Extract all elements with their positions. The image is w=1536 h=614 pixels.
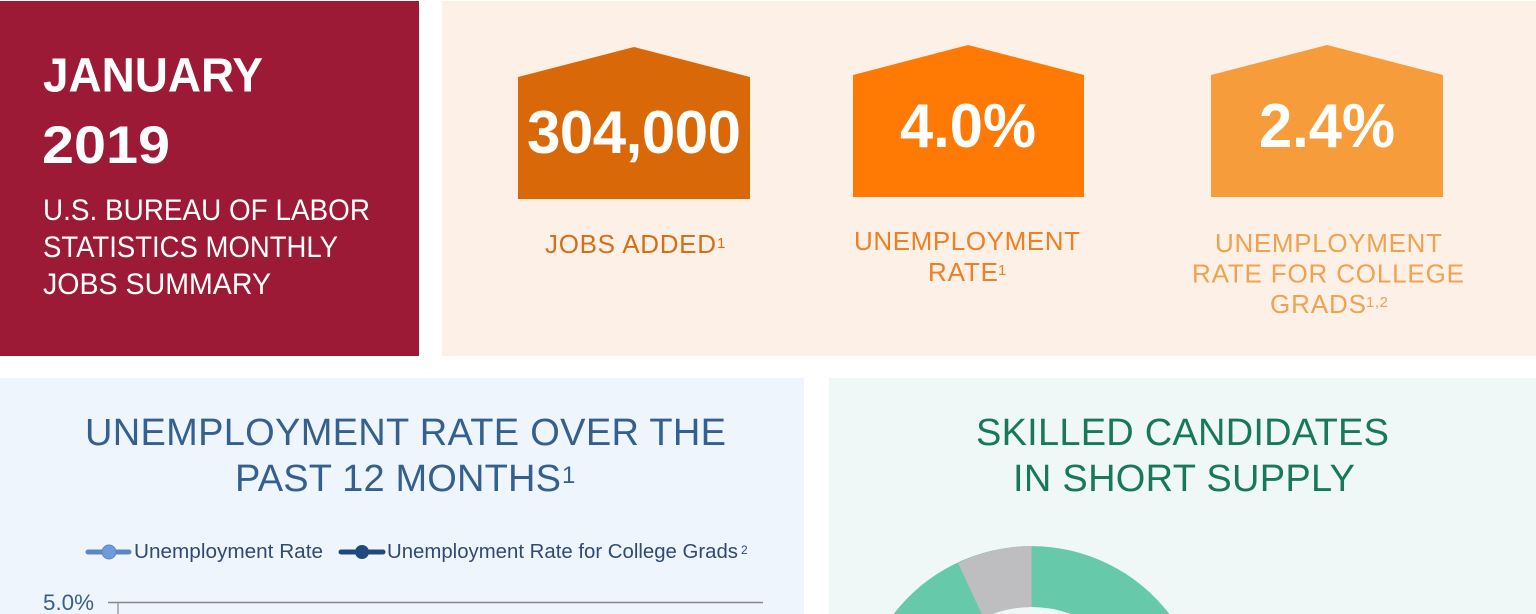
donut segment: gray — [958, 546, 1032, 614]
heading: January 2019 — [42, 50, 263, 175]
heading: unemployment rate over the past 12 months — [85, 412, 726, 500]
panel: skilled candidates donut — [829, 378, 1536, 614]
heading: January 2019: JANUARY — [43, 50, 263, 102]
panel: date and source — [0, 1, 419, 356]
legend: college grads: 2 — [741, 543, 748, 557]
text: report source: JOBS SUMMARY — [43, 268, 271, 301]
stat: unemployment rate: 4.0% — [900, 92, 1036, 161]
stat: jobs added: 1 — [717, 235, 725, 252]
stat: unemployment rate: RATE — [928, 257, 998, 287]
stat: jobs added: JOBS ADDED — [545, 229, 716, 259]
stat: unemployment rate for college grads — [1192, 45, 1464, 319]
panel: unemployment line chart — [0, 378, 804, 614]
heading: unemployment rate over the past 12 months: UNEMPLOYMENT RATE OVER THE — [85, 412, 726, 454]
heading: unemployment rate over the past 12 months: PAST 12 MONTHS — [235, 458, 561, 500]
stat: unemployment rate for college grads: 2.4% — [1259, 92, 1395, 161]
text: report source: U.S. BUREAU OF LABOR — [43, 194, 370, 227]
stat: unemployment rate for college grads: UNEMPLOYMENT — [1215, 228, 1442, 258]
heading: January 2019: 2019 — [42, 116, 170, 175]
stat: unemployment rate: 1 — [998, 262, 1006, 279]
stat: unemployment rate: UNEMPLOYMENT — [854, 226, 1080, 256]
heading: skilled candidates in short supply — [976, 412, 1389, 500]
stat: unemployment rate for college grads: 1,2 — [1366, 294, 1388, 311]
chart legend — [88, 541, 748, 563]
stat: jobs added — [518, 47, 750, 259]
heading: unemployment rate over the past 12 months: 1 — [562, 462, 575, 489]
legend: college grads: Unemployment Rate for College Grads — [387, 541, 738, 563]
stat: unemployment rate for college grads: RATE FOR COLLEGE — [1192, 258, 1464, 288]
stat: unemployment rate for college grads: GRADS — [1270, 289, 1366, 319]
stat: unemployment rate — [853, 45, 1084, 287]
donut chart — [894, 546, 1169, 614]
text: report source: STATISTICS MONTHLY — [43, 231, 338, 264]
heading: skilled candidates in short supply: IN SHORT SUPPLY — [1013, 458, 1355, 500]
stat: jobs added: 304,000 — [527, 99, 741, 166]
heading: skilled candidates in short supply: SKILLED CANDIDATES — [976, 412, 1389, 454]
text: report source — [43, 194, 370, 301]
legend: unemployment rate: Unemployment Rate — [134, 541, 323, 563]
panel: key figures — [442, 1, 1536, 356]
